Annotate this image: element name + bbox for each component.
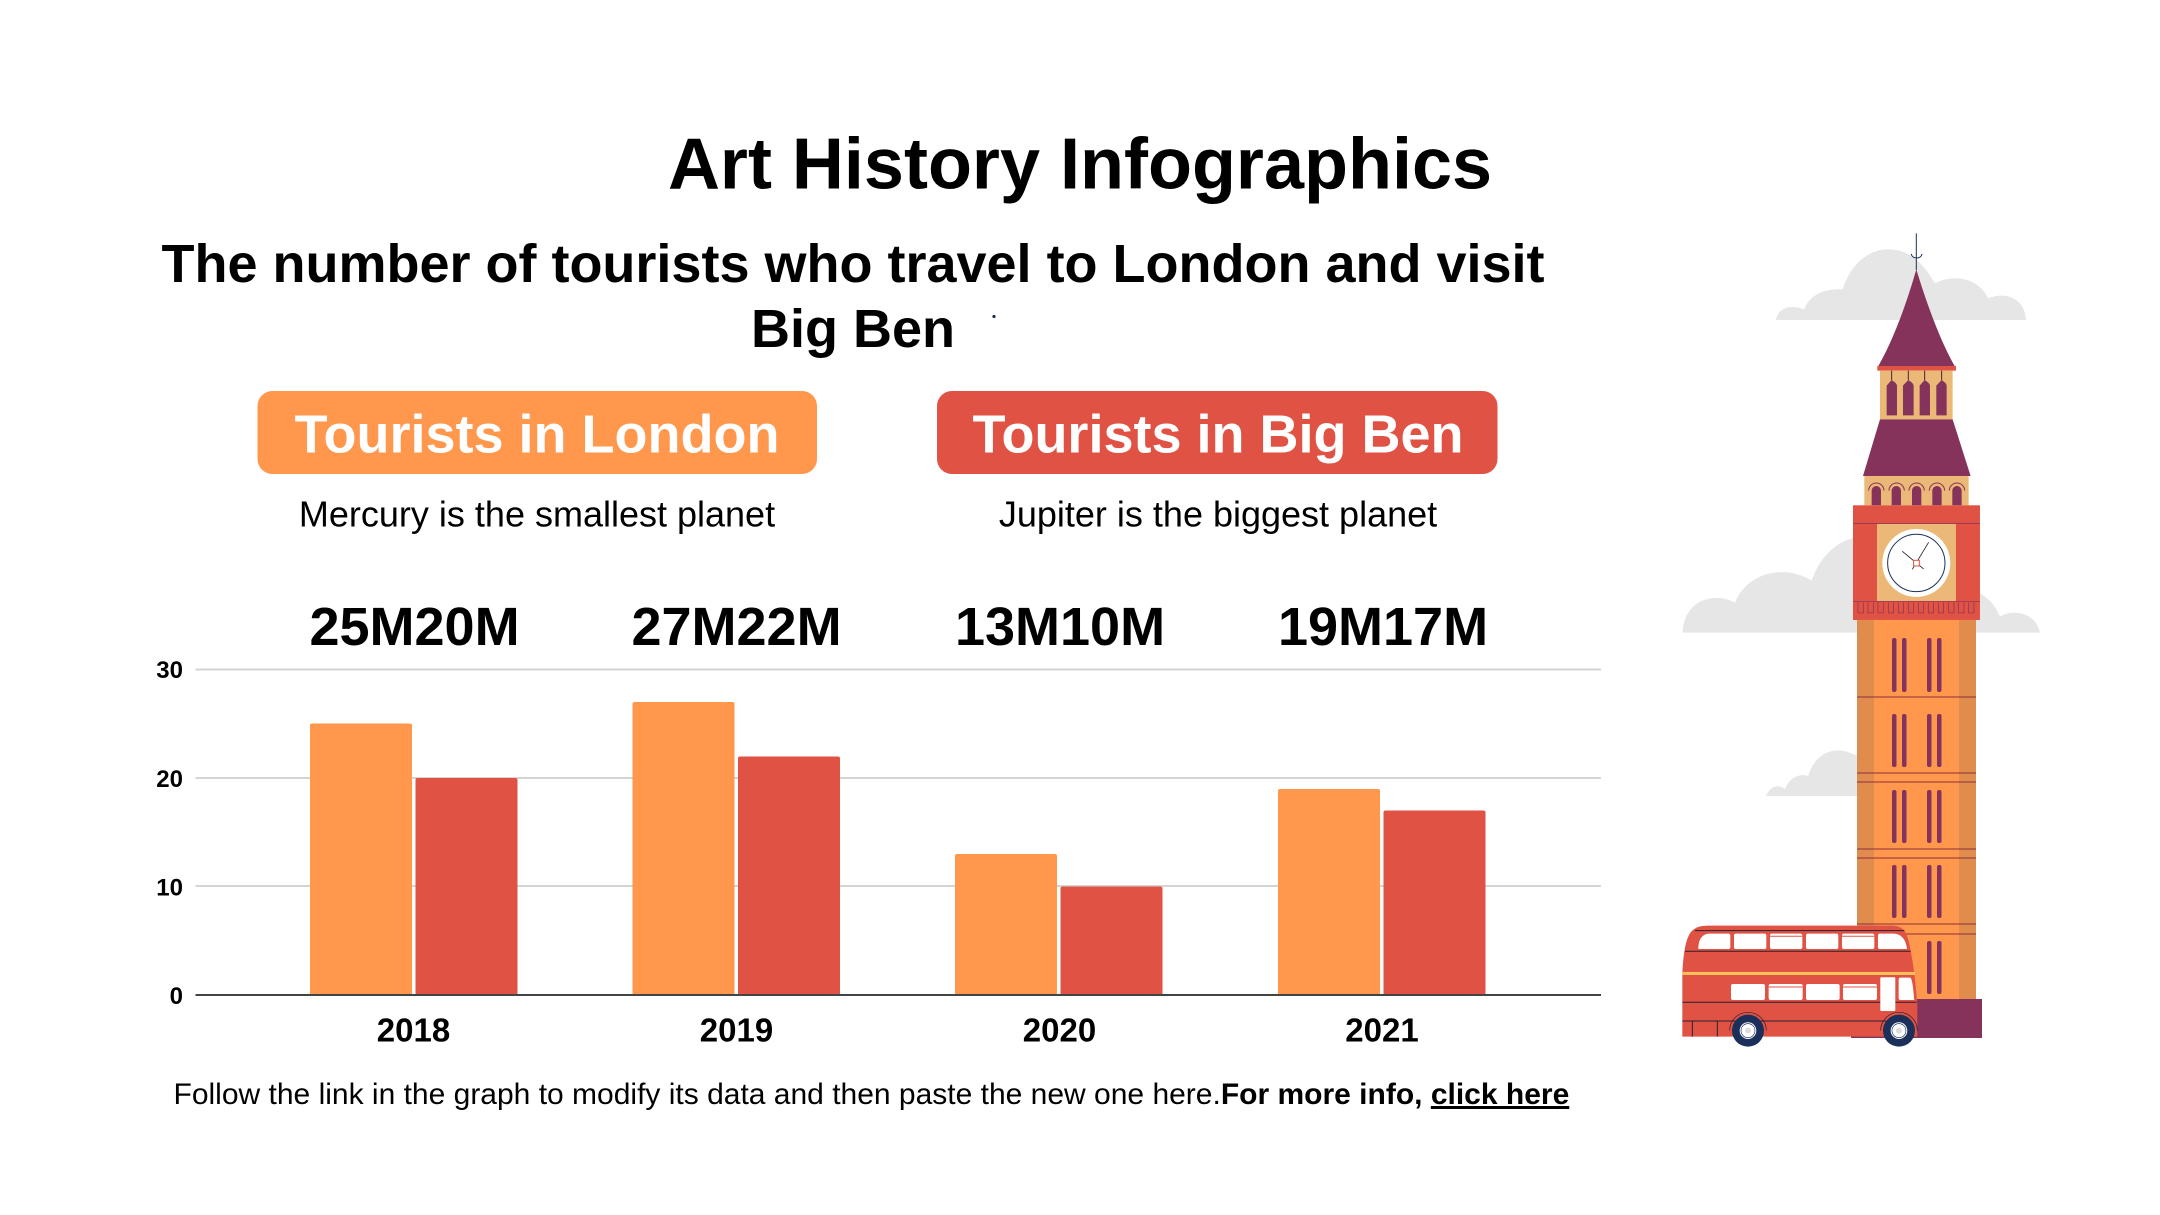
bars 2019 <box>632 702 840 995</box>
x axis labels <box>377 1012 1419 1048</box>
value labels: 25M20M <box>309 597 520 657</box>
legend: tourists in Big Ben: Jupiter is the biggest planet <box>999 494 1437 534</box>
y axis labels: 0 <box>170 983 183 1010</box>
legend: tourists in Big Ben <box>937 391 1498 534</box>
y axis labels: 10 <box>156 874 183 902</box>
tower shaft <box>1851 620 1982 1038</box>
icon: Big Ben tower <box>1851 233 1982 1038</box>
value labels <box>309 597 1488 657</box>
icon: clock face <box>1882 529 1950 597</box>
subtitle <box>161 234 1545 359</box>
bars 2021 <box>1278 789 1486 995</box>
y axis labels: 30 <box>156 657 183 684</box>
subtitle: Big Ben <box>751 299 955 359</box>
legend: tourists in London: Mercury is the smallest planet <box>299 494 775 534</box>
legend: tourists in London <box>258 391 817 534</box>
footer note: Follow the link in the graph to modify its data and then paste the new one here.For more info, click here <box>174 1078 1569 1111</box>
tower spire and roofs <box>1853 233 1980 620</box>
value labels: 13M10M <box>955 597 1165 657</box>
y axis labels <box>156 657 183 1010</box>
stray dot <box>992 315 996 318</box>
x axis labels: 2019 <box>700 1012 773 1048</box>
value labels: 19M17M <box>1278 597 1488 657</box>
bus wheels <box>1730 1012 1917 1047</box>
subtitle: The number of tourists who travel to London and visit <box>161 234 1545 294</box>
bars 2020 <box>955 854 1162 995</box>
legend: tourists in London: Tourists in London <box>295 404 779 464</box>
x axis labels: 2020 <box>1023 1012 1096 1048</box>
x axis labels: 2021 <box>1345 1012 1419 1048</box>
bar chart <box>156 597 1601 1048</box>
y axis labels: 20 <box>156 766 183 793</box>
title: Art History Infographics <box>668 124 1492 204</box>
legend: tourists in Big Ben: Tourists in Big Ben <box>972 404 1464 464</box>
x axis labels: 2018 <box>377 1012 450 1048</box>
bars 2018 <box>310 724 518 995</box>
value labels: 27M22M <box>631 597 842 657</box>
icon: red double-decker bus <box>1682 926 1917 1047</box>
clouds <box>1683 249 2040 796</box>
